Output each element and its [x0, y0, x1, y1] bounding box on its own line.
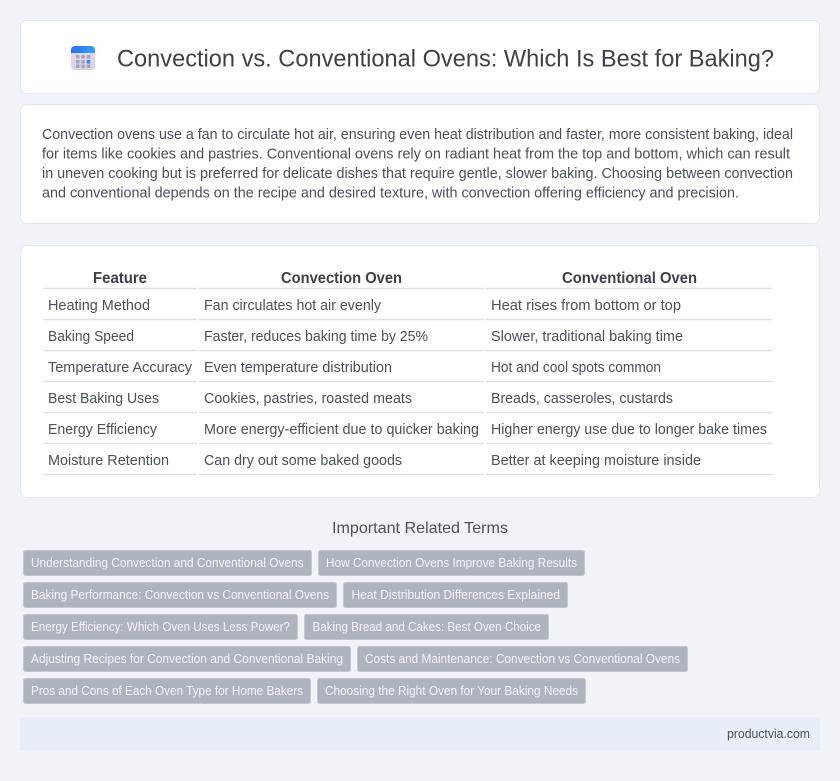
row: moisture retention: Moisture Retention — [48, 453, 169, 469]
panel: intro paragraph: in uneven cooking but is preferred for delicate dishes that require gentle, slower baking. Choosing between convection — [42, 166, 793, 182]
row: temperature accuracy — [48, 360, 661, 376]
tag — [344, 582, 568, 608]
tag — [318, 550, 584, 576]
panel: intro paragraph: and conventional depends on the recipe and desired texture, with convection offering efficiency and precision. — [42, 186, 739, 202]
row: temperature accuracy: Hot and cool spots common — [491, 360, 661, 376]
tag — [24, 582, 336, 608]
row: temperature accuracy: Even temperature distribution — [204, 360, 392, 376]
tag: Choosing the Right Oven for Your Baking Needs — [325, 684, 578, 698]
table header: Feature — [93, 270, 147, 287]
row: best baking uses — [48, 391, 673, 407]
tag — [358, 646, 688, 672]
row: heating method: Heating Method — [48, 298, 150, 314]
row: baking speed: Slower, traditional baking time — [491, 329, 683, 345]
row: heating method: Fan circulates hot air evenly — [204, 298, 382, 314]
tag — [24, 550, 312, 576]
tag — [318, 678, 586, 704]
tag: Adjusting Recipes for Convection and Conventional Baking — [31, 652, 343, 666]
tag — [304, 614, 548, 640]
tag — [24, 646, 350, 672]
icon: calendar grid — [71, 46, 95, 70]
tag: Baking Performance: Convection vs Conventional Ovens — [31, 588, 329, 602]
row: baking speed: Faster, reduces baking time by 25% — [204, 329, 428, 345]
row: best baking uses: Cookies, pastries, roasted meats — [204, 391, 412, 407]
panel: intro paragraph: for items like cookies and pastries. Conventional ovens rely on radiant heat from the top and bottom, which can result — [42, 146, 790, 162]
tag — [24, 614, 298, 640]
tag: Heat Distribution Differences Explained — [352, 588, 560, 602]
title: Convection vs. Conventional Ovens: Which Is Best for Baking? — [117, 46, 774, 72]
tag list — [24, 550, 688, 704]
row: baking speed — [48, 329, 683, 345]
row: heating method — [48, 298, 681, 314]
tag: Pros and Cons of Each Oven Type for Home Bakers — [31, 684, 303, 698]
row: best baking uses: Breads, casseroles, custards — [491, 391, 673, 407]
heading: related terms: Important Related Terms — [332, 520, 508, 537]
row: best baking uses: Best Baking Uses — [48, 391, 159, 407]
panel: intro paragraph: Convection ovens use a fan to circulate hot air, ensuring even heat distribution and faster, more consistent baking, ideal — [42, 127, 793, 143]
row: moisture retention — [48, 453, 701, 469]
tag: Energy Efficiency: Which Oven Uses Less Power? — [31, 620, 290, 634]
row: temperature accuracy: Temperature Accuracy — [48, 360, 193, 376]
panel: header — [20, 20, 820, 94]
tag: How Convection Ovens Improve Baking Results — [326, 556, 577, 570]
row: energy efficiency: Higher energy use due to longer bake times — [491, 422, 767, 438]
row: energy efficiency: Energy Efficiency — [48, 422, 158, 438]
tag: Understanding Convection and Conventional Ovens — [31, 556, 304, 570]
row: baking speed: Baking Speed — [48, 329, 134, 345]
panel: comparison table — [20, 246, 820, 498]
tag: Costs and Maintenance: Convection vs Conventional Ovens — [365, 652, 680, 666]
table header: Convection Oven — [281, 270, 402, 287]
footer — [20, 717, 820, 751]
footer: productvia.com — [727, 727, 810, 741]
row: energy efficiency: More energy-efficient due to quicker baking — [204, 422, 479, 438]
panel: intro paragraph — [20, 104, 820, 224]
table header: Conventional Oven — [562, 270, 697, 287]
tag: Baking Bread and Cakes: Best Oven Choice — [312, 620, 541, 634]
row: energy efficiency — [48, 422, 767, 438]
table header — [93, 270, 697, 287]
row: heating method: Heat rises from bottom or top — [491, 298, 681, 314]
row: moisture retention: Better at keeping moisture inside — [491, 453, 701, 469]
tag — [24, 678, 310, 704]
row: moisture retention: Can dry out some baked goods — [204, 453, 402, 469]
